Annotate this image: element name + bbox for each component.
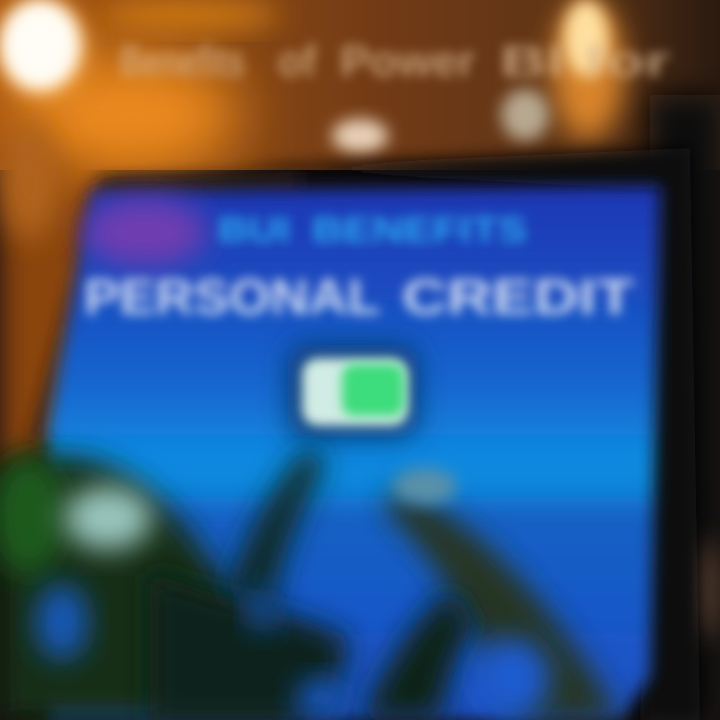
leaf: blue-grey highlight	[393, 468, 457, 504]
icon: green and white button	[288, 345, 418, 437]
plant: foreground leaves	[0, 445, 620, 720]
screen headline: white text: CREDIT	[402, 269, 634, 325]
monitor bezel	[30, 148, 700, 720]
heading: blurred title text: Benefits	[120, 37, 245, 86]
heading: blurred title text: of	[278, 37, 316, 86]
screen headline: white text: PERSONAL	[84, 269, 380, 325]
purple corner of screen	[83, 198, 207, 266]
light: secondary flare	[552, 0, 624, 140]
screen heading: cyan text: BENEFITS	[312, 209, 527, 250]
panel: monitor screen	[48, 186, 660, 720]
screen headline: white text	[84, 269, 634, 325]
screen heading: cyan text	[218, 209, 527, 250]
leaf: pale highlight	[64, 486, 152, 550]
heading: blurred title text: Power	[340, 37, 475, 86]
screen heading: cyan text: BUI	[218, 209, 290, 250]
light: bright sun flare	[0, 0, 84, 96]
heading: blurred second title line	[332, 89, 549, 153]
screen gaps between leaves	[36, 584, 88, 660]
heading: blurred title text	[120, 37, 670, 86]
heading: blurred title text: BI for	[500, 37, 670, 86]
